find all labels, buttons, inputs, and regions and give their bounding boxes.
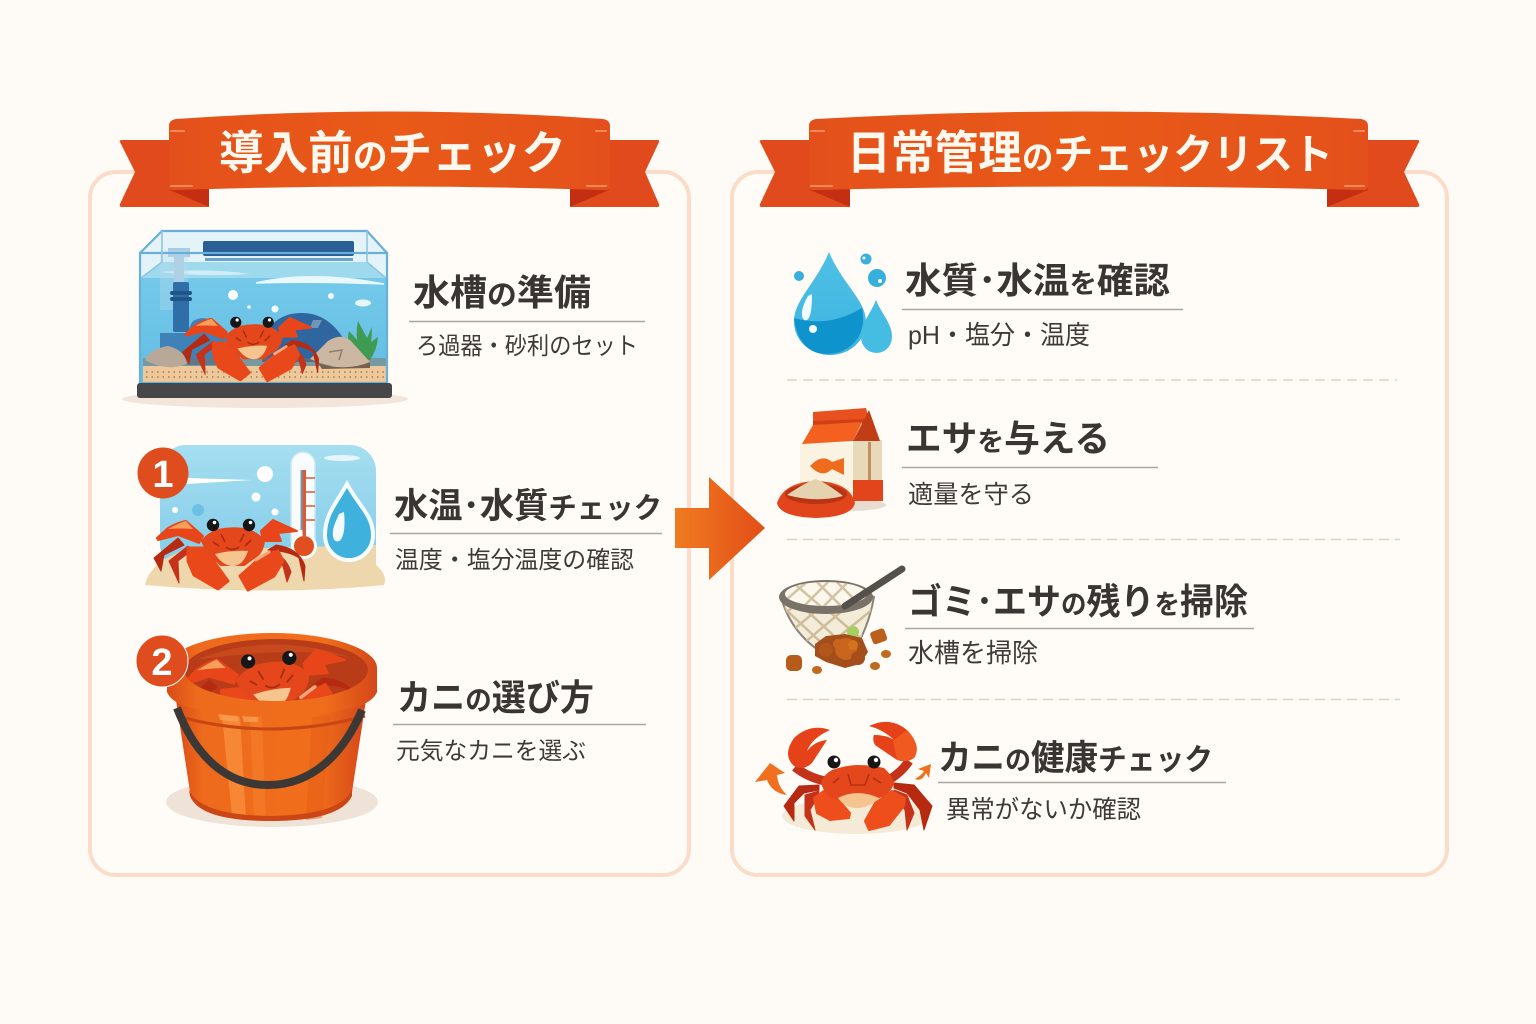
icon: bucket with crab <box>136 633 378 827</box>
text: 温度・塩分温度の確認: 温度・塩分温度の確認 <box>395 547 634 574</box>
icon: water drops <box>794 252 892 355</box>
banner: 日常管理のチェックリスト <box>760 112 1419 207</box>
panel: pre-introduction check <box>90 112 689 875</box>
heading: エサを与える: エサを与える <box>906 418 1110 459</box>
badge: 2: 2 <box>151 642 173 684</box>
badge: 1 <box>138 448 188 498</box>
text: 異常がないか確認: 異常がないか確認 <box>946 796 1141 824</box>
item: feeding <box>777 408 1158 518</box>
panel: daily management checklist <box>732 112 1447 875</box>
item: choosing crabs <box>136 633 646 827</box>
text: 適量を守る: 適量を守る <box>908 481 1034 509</box>
heading: 日常管理のチェックリスト: 日常管理のチェックリスト <box>847 127 1333 179</box>
text: ろ過器・砂利のセット: ろ過器・砂利のセット <box>416 333 638 360</box>
icon: aquarium with crab <box>122 231 408 408</box>
text: pH・塩分・温度: pH・塩分・温度 <box>908 320 1090 350</box>
item: aquarium preparation <box>122 231 645 408</box>
item: water quality <box>794 252 1183 355</box>
item: water temperature and quality check <box>138 445 662 590</box>
heading: 水質・水温を確認: 水質･水温を確認 <box>905 260 1170 301</box>
item: crab health <box>755 722 1226 834</box>
banner: 導入前のチェック <box>120 112 659 207</box>
heading: カニの健康チェック: カニの健康チェック <box>938 739 1213 778</box>
item: cleaning <box>770 569 1254 674</box>
heading: ゴミ・エサの残りを掃除: ゴミ･エサの残りを掃除 <box>908 581 1248 622</box>
icon: crab with thermometer and water drop <box>138 445 385 590</box>
text: 水槽を掃除: 水槽を掃除 <box>908 638 1038 668</box>
icon: crab with orange arrows <box>755 722 932 834</box>
icon: feed bag and bowl <box>777 408 886 518</box>
arrow <box>675 477 765 580</box>
badge: 1: 1 <box>152 454 174 496</box>
heading: 導入前のチェック: 導入前のチェック <box>219 127 566 179</box>
heading: 水槽の準備: 水槽の準備 <box>413 272 591 313</box>
text: 元気なカニを選ぶ: 元気なカニを選ぶ <box>396 738 586 765</box>
heading: 水温・水質チェック: 水温･水質チェック <box>394 487 662 526</box>
icon: net with debris <box>770 569 902 674</box>
heading: カニの選び方: カニの選び方 <box>397 677 594 718</box>
badge: 2 <box>136 635 188 687</box>
